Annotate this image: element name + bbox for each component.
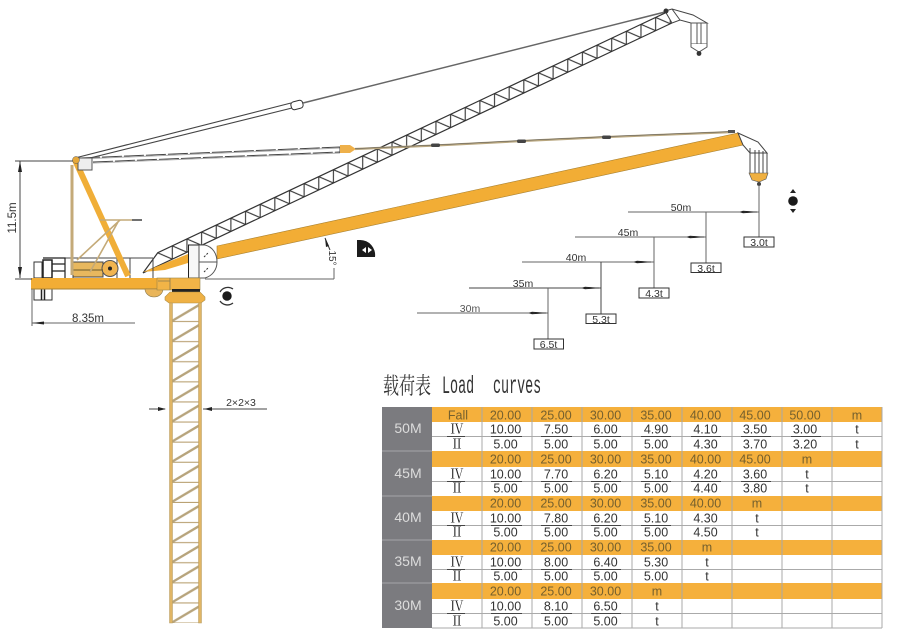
table group: 35M: 5.00 xyxy=(493,570,518,584)
dimension: 15 degree angle xyxy=(205,238,337,279)
table group: 35M: 25.00 xyxy=(540,540,572,554)
slewing unit xyxy=(157,278,205,303)
table group: 40M: 5.00 xyxy=(593,526,618,540)
table group: 40M: 4.30 xyxy=(693,512,718,526)
A-frame mast xyxy=(72,156,142,276)
table group: 45M: 6.20 xyxy=(593,468,618,482)
table group: 30M: 5.00 xyxy=(493,614,518,628)
table group: 40M: 40M xyxy=(394,509,422,525)
table group: 50M: 5.00 xyxy=(644,438,668,452)
table group: 50M: 3.50 xyxy=(743,422,767,436)
table group: 50M: 4.10 xyxy=(693,422,718,436)
table group: 50M: t xyxy=(855,422,859,436)
table group: 40M: Ⅱ xyxy=(450,524,464,540)
table group: 40M: 5.00 xyxy=(644,526,668,540)
table group: 45M: 45M xyxy=(394,465,422,481)
load at 35m radius: 35m xyxy=(513,278,533,290)
table group: 35M: Ⅳ xyxy=(450,554,464,570)
table group: 45M: t xyxy=(805,468,809,482)
table group: 45M: Ⅱ xyxy=(450,480,464,496)
table group: 50M: 4.30 xyxy=(693,438,718,452)
table title: curves xyxy=(493,373,541,402)
table group: 40M: 30.00 xyxy=(590,496,621,510)
icon: hoist up and down xyxy=(788,189,798,213)
upper jib ties xyxy=(75,12,665,160)
table group: 30M: t xyxy=(655,600,659,614)
luffing lattice jib xyxy=(138,12,672,273)
table group: 35M: 5.30 xyxy=(644,556,668,570)
table group: 35M: 8.00 xyxy=(544,556,568,570)
table group: 50M: Ⅳ xyxy=(450,422,464,436)
table group: 50M: 45.00 xyxy=(739,408,771,422)
table group: 30M: 5.00 xyxy=(593,614,618,628)
dimension: 15 degree angle: 15° xyxy=(326,250,337,266)
table group: 35M: t xyxy=(705,570,709,584)
table group: 45M: Ⅳ xyxy=(450,466,464,482)
table group: 35M: 6.40 xyxy=(593,556,618,570)
table group: 45M: 25.00 xyxy=(540,452,572,466)
table group: 35M: Ⅱ xyxy=(450,568,464,584)
table group: 40M: 40.00 xyxy=(690,496,721,510)
table group: 40M: t xyxy=(755,526,759,540)
icon: luffing quarter circle xyxy=(357,240,375,257)
table group: 35M: 35.00 xyxy=(640,540,672,554)
table group: 40M: 25.00 xyxy=(540,496,572,510)
table group: 35M: t xyxy=(705,556,709,570)
load table grid xyxy=(382,407,882,628)
load at 45m radius: 45m xyxy=(618,227,638,239)
table group: 45M: 10.00 xyxy=(490,468,521,482)
table group: 35M: 20.00 xyxy=(490,540,521,554)
tower mast xyxy=(170,303,202,623)
table group: 30M: 6.50 xyxy=(593,600,618,614)
table group: 50M: 3.20 xyxy=(793,438,817,452)
table group: 45M: 3.80 xyxy=(743,482,767,496)
table group: 30M: 30.00 xyxy=(590,584,621,598)
table group: 45M: 5.10 xyxy=(644,468,668,482)
table title: 载荷表 xyxy=(383,374,431,399)
dimension: 11.5m height xyxy=(7,161,73,279)
load at 40m radius xyxy=(522,237,669,300)
table group: 50M: 7.50 xyxy=(544,422,568,436)
table group: 35M: 5.00 xyxy=(593,570,618,584)
table group: 45M: m xyxy=(802,452,812,466)
load at 30m radius: 30m xyxy=(460,303,480,315)
table group: 35M: 5.00 xyxy=(544,570,568,584)
lower jib ties xyxy=(80,130,735,163)
table group: 35M: 10.00 xyxy=(490,556,521,570)
table group: 45M: 5.00 xyxy=(493,482,518,496)
table group: 30M: Ⅱ xyxy=(450,614,464,628)
table group: 40M: t xyxy=(755,512,759,526)
load at 30m radius: 6.5t xyxy=(540,339,557,351)
table group: 45M: 4.40 xyxy=(693,482,718,496)
table group: 45M: 4.20 xyxy=(693,468,718,482)
table group: 40M: 7.80 xyxy=(544,512,568,526)
table group: 35M: 30.00 xyxy=(590,540,621,554)
table group: 45M: 40.00 xyxy=(690,452,721,466)
table group: 50M: 50M xyxy=(394,420,422,436)
table group: 45M: 35.00 xyxy=(640,452,672,466)
table group: 45M xyxy=(394,452,812,496)
table group: 45M: 3.60 xyxy=(743,468,767,482)
table group: 45M: 30.00 xyxy=(590,452,621,466)
table group: 45M: 5.00 xyxy=(644,482,668,496)
load at 30m radius xyxy=(417,288,564,351)
table group: 40M: m xyxy=(752,496,762,510)
table group: 35M xyxy=(394,540,712,584)
table group: 50M: 5.00 xyxy=(593,438,618,452)
load at 45m radius xyxy=(575,212,721,275)
table group: 30M: 8.10 xyxy=(544,600,568,614)
table group: 40M: 4.50 xyxy=(693,526,718,540)
load at 35m radius: 5.3t xyxy=(592,314,610,326)
table group: 30M: 30M xyxy=(394,597,422,613)
table group: 40M: Ⅳ xyxy=(450,510,464,526)
table group: 40M: 5.00 xyxy=(493,526,518,540)
table group: 50M: 5.00 xyxy=(493,438,518,452)
load at 50m radius: 3.0t xyxy=(750,237,768,249)
table group: 40M: 5.10 xyxy=(644,512,668,526)
table group: 40M xyxy=(394,496,762,540)
table group: 30M: 5.00 xyxy=(544,614,568,628)
table group: 50M: 25.00 xyxy=(540,408,572,422)
table group: 50M: 35.00 xyxy=(640,408,672,422)
table group: 50M: 50.00 xyxy=(789,408,821,422)
table group: 30M: t xyxy=(655,614,659,628)
table group: 30M: 20.00 xyxy=(490,584,521,598)
table group: 40M: 10.00 xyxy=(490,512,521,526)
table group: 40M: 35.00 xyxy=(640,496,672,510)
table group: 30M: 10.00 xyxy=(490,600,521,614)
table group: 45M: 5.00 xyxy=(544,482,568,496)
table group: 50M xyxy=(394,408,862,452)
yellow main jib xyxy=(143,133,743,272)
table group: 50M: t xyxy=(855,438,859,452)
dimension: 11.5m height: 11.5m xyxy=(7,202,19,234)
table group: 40M: 5.00 xyxy=(544,526,568,540)
dimension: 2x2x3 mast section xyxy=(149,397,267,411)
table group: 45M: t xyxy=(805,482,809,496)
table group: 50M: 3.70 xyxy=(743,438,767,452)
table group: 40M: 6.20 xyxy=(593,512,618,526)
table group: 50M: 30.00 xyxy=(590,408,621,422)
table group: 30M: Ⅳ xyxy=(450,598,464,614)
load at 50m radius: 50m xyxy=(671,202,691,214)
table group: 45M: 20.00 xyxy=(490,452,521,466)
table group: 50M: 6.00 xyxy=(593,422,618,436)
table group: 50M: Ⅱ xyxy=(450,436,464,452)
table group: 50M: Fall xyxy=(448,408,468,422)
slewing cab box xyxy=(188,245,217,278)
table group: 50M: 10.00 xyxy=(490,422,521,436)
table group: 50M: 3.00 xyxy=(793,422,817,436)
dimension: 2x2x3 mast section: 2×2×3 xyxy=(226,397,256,409)
table group: 30M xyxy=(394,584,662,628)
counter jib with machinery xyxy=(31,258,163,300)
dimension: 8.35m counter jib xyxy=(32,289,135,326)
table group: 30M: m xyxy=(652,584,662,598)
table group: 50M: m xyxy=(852,408,862,422)
load at 40m radius: 4.3t xyxy=(645,288,663,300)
table group: 45M: 7.70 xyxy=(544,468,568,482)
load at 45m radius: 3.6t xyxy=(697,263,715,275)
table group: 35M: 35M xyxy=(394,553,422,569)
load at 35m radius xyxy=(469,262,616,326)
table group: 50M: 20.00 xyxy=(490,408,521,422)
load at 50m radius xyxy=(628,185,774,249)
dimension: 8.35m counter jib: 8.35m xyxy=(72,313,104,325)
table group: 30M: 25.00 xyxy=(540,584,572,598)
table group: 45M: 5.00 xyxy=(593,482,618,496)
icon: slewing rotation xyxy=(220,287,233,305)
table group: 35M: m xyxy=(702,540,712,554)
table group: 45M: 45.00 xyxy=(739,452,771,466)
load at 40m radius: 40m xyxy=(566,252,586,264)
table group: 50M: 4.90 xyxy=(644,422,668,436)
table group: 40M: 20.00 xyxy=(490,496,521,510)
table title: Load xyxy=(442,373,474,402)
table title xyxy=(383,373,541,402)
table group: 50M: 5.00 xyxy=(544,438,568,452)
lattice jib head with hook xyxy=(664,8,707,56)
jib end sheaves and hook block xyxy=(738,133,768,186)
table group: 35M: 5.00 xyxy=(644,570,668,584)
table group: 50M: 40.00 xyxy=(690,408,721,422)
